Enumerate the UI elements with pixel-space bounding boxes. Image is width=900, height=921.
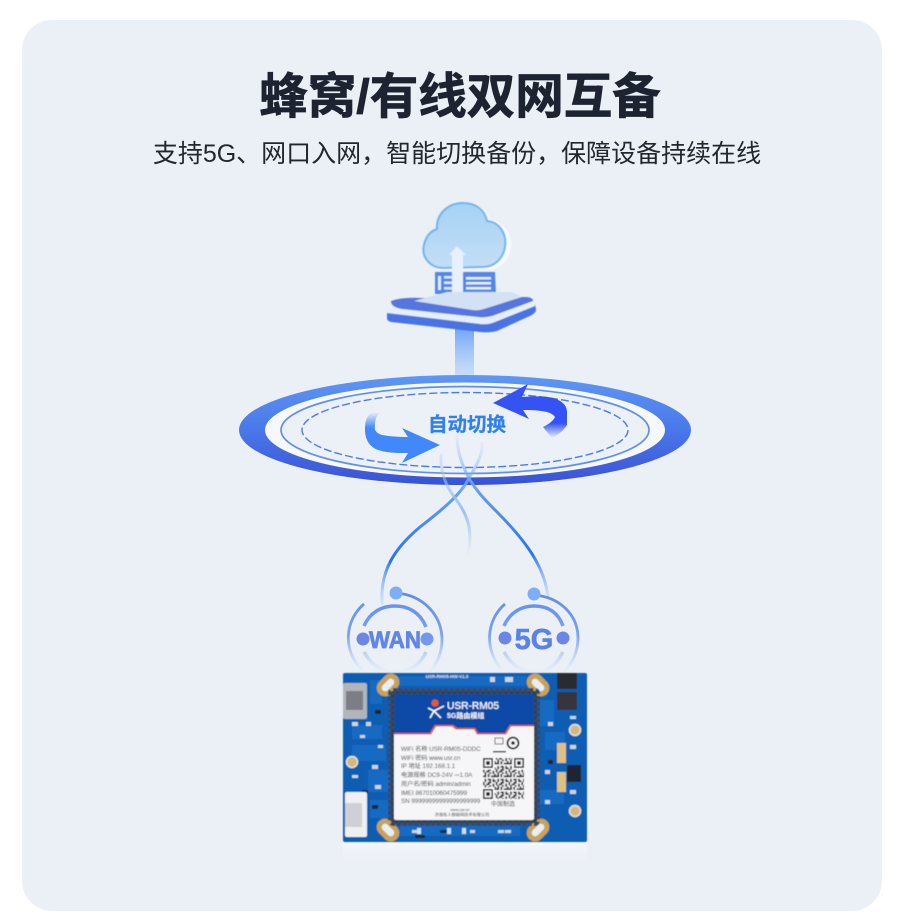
upload arrow [449, 246, 466, 293]
white connector [345, 792, 367, 837]
spec lines: SN 99999999999999999999 [401, 798, 481, 805]
antenna connectors [346, 724, 580, 816]
spec lines: www.usr.cn [450, 808, 470, 812]
connection lines [382, 436, 548, 603]
mounting holes [377, 674, 549, 841]
router board [343, 673, 587, 842]
arrow: switch left [493, 384, 567, 438]
certification marks [493, 738, 518, 752]
arrow: switch right [365, 412, 440, 463]
spec lines: IMEI 867010060475999 [401, 790, 468, 797]
module label [394, 694, 534, 820]
module pads [391, 691, 537, 823]
icon: WAN: WAN [369, 627, 421, 654]
logo [428, 700, 444, 718]
label: auto switch: 自动切换 [428, 414, 506, 436]
spec lines: 济南有人物联网技术有限公司 [435, 811, 489, 818]
pcb [343, 673, 587, 842]
icon: WAN [348, 586, 442, 672]
thin ring [281, 386, 649, 474]
spec lines: 电源规格 DC9-24V ⎓1.0A [401, 771, 473, 779]
spec lines [401, 745, 489, 818]
usb port [343, 683, 367, 719]
spec lines: WiFi 名称 USR-RM05-DDDC [401, 745, 481, 753]
product name: USR-RM05 [447, 700, 499, 712]
spec lines: WiFi 密码 www.usr.cn [401, 754, 461, 762]
icon: cloud platform [387, 202, 536, 332]
icon: 5G: 5G [515, 624, 553, 656]
ring: auto switch [239, 375, 691, 485]
board reflection [343, 842, 587, 862]
made in china: 中国制造 [491, 800, 515, 808]
router board: 5G路由模组 [447, 711, 484, 720]
leds [417, 828, 466, 834]
icon: 5G [490, 588, 578, 672]
spec lines: IP 地址 192.168.1.1 [401, 762, 456, 770]
cloud [423, 202, 511, 270]
side components [557, 743, 566, 763]
title: 蜂窝/有线双网互备 [259, 70, 661, 124]
dashed ring [302, 392, 628, 468]
subtitle: 支持5G、网口入网，智能切换备份，保障设备持续在线 [153, 140, 761, 168]
platform [387, 292, 536, 332]
connector stem [455, 328, 474, 380]
module header [394, 694, 534, 733]
silk text: USR-RM05-HW-V1.0 [426, 674, 469, 679]
qr code [483, 758, 524, 799]
spec lines: 用户名/密码 admin/admin [401, 780, 471, 788]
outer ring [239, 375, 691, 485]
server box [435, 272, 496, 294]
inductors [557, 673, 577, 689]
